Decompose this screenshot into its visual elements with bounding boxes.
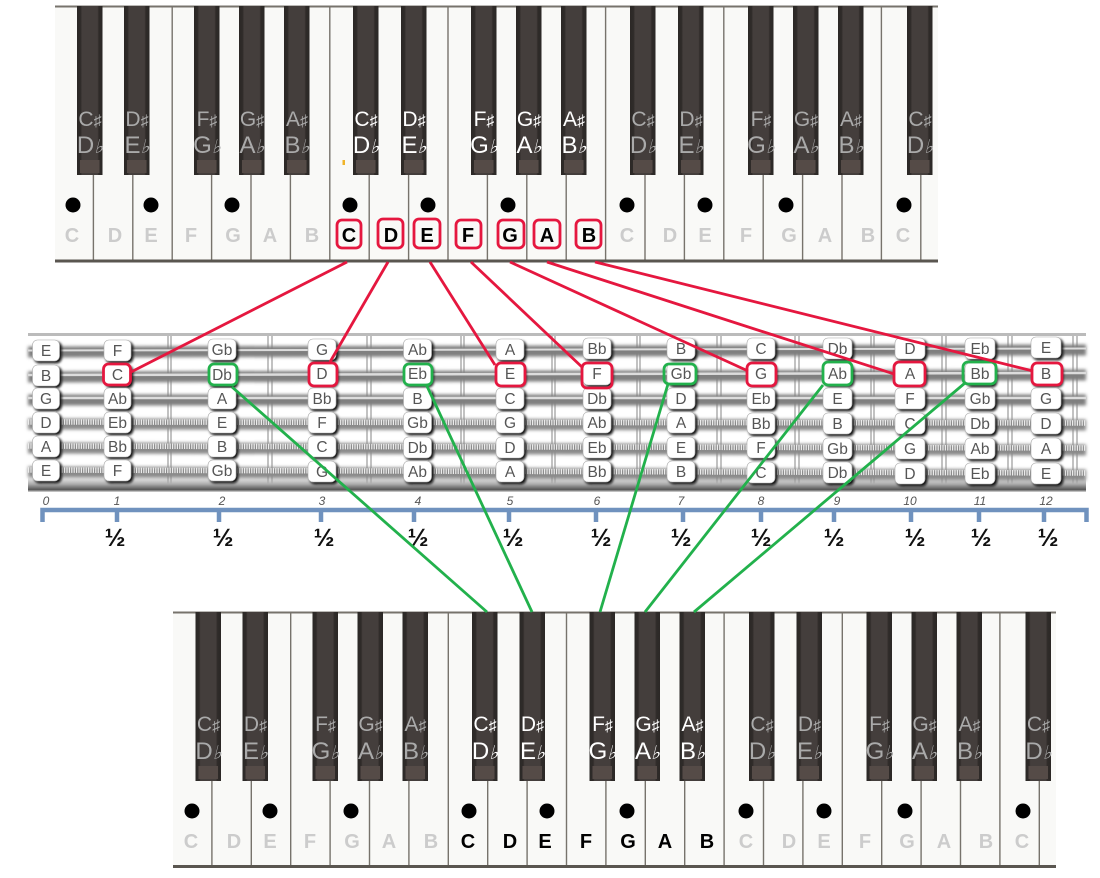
- note names: C: [755, 341, 767, 358]
- note names: Bb: [108, 439, 127, 456]
- note names: D: [40, 415, 52, 432]
- half-step labels: ½: [314, 524, 334, 552]
- red connector lines from top keyboard to natural notes on fretboard: [131, 262, 1033, 374]
- position dots, bottom keyboard: [184, 804, 1030, 818]
- black keys with sharp and flat names, bottom keyboard: C♯: [473, 713, 497, 736]
- note names: Gb: [827, 441, 848, 458]
- note names: C: [755, 465, 767, 482]
- black keys with sharp and flat names, bottom keyboard: G♯: [635, 713, 660, 736]
- black keys with sharp and flat names, top keyboard: G♭: [747, 132, 776, 159]
- note names: Gb: [970, 391, 990, 408]
- white key names, top keyboard: G: [502, 225, 518, 247]
- note names: Eb: [971, 466, 989, 483]
- white key names, top keyboard: F: [185, 225, 197, 247]
- note names: Ab: [108, 391, 127, 408]
- note names: B: [676, 464, 686, 481]
- half-step ruler bracket: [42, 510, 1086, 522]
- note names: Gb: [407, 415, 428, 432]
- fret numbers: 0: [43, 494, 50, 508]
- black keys with sharp and flat names, bottom keyboard: B♭: [957, 738, 983, 765]
- note names: A: [676, 415, 687, 432]
- fret numbers: 2: [218, 494, 226, 508]
- fret numbers: 10: [903, 494, 917, 508]
- half-step labels: ½: [971, 524, 991, 552]
- note names: A: [41, 439, 52, 456]
- black keys with sharp and flat names, bottom keyboard: A♭: [358, 738, 384, 765]
- half-step labels: ½: [503, 524, 523, 552]
- black keys with sharp and flat names, top keyboard: G♯: [517, 108, 541, 131]
- note names: A: [905, 366, 916, 383]
- note names: Bb: [588, 341, 606, 358]
- note names: D: [504, 440, 516, 457]
- red highlight boxes around natural notes: [337, 219, 601, 248]
- half-step labels: ½: [591, 524, 611, 552]
- note names: Eb: [971, 341, 989, 358]
- note names: G: [316, 464, 328, 481]
- white key names, bottom keyboard: G: [344, 831, 360, 853]
- black keys with sharp and flat names, top keyboard: F♯: [474, 108, 494, 131]
- black keys with sharp and flat names, top keyboard: G♯: [794, 108, 818, 131]
- fret numbers: 12: [1039, 494, 1053, 508]
- note names: G: [1040, 391, 1052, 408]
- black keys with sharp and flat names, bottom keyboard: D♭: [195, 738, 223, 765]
- black keys with sharp and flat names, bottom keyboard: B♭: [680, 738, 706, 765]
- black keys with sharp and flat names, top keyboard: E♭: [402, 132, 428, 159]
- white key names, top keyboard: C: [620, 225, 634, 247]
- note names: B: [41, 368, 51, 385]
- black keys with sharp and flat names, top keyboard: D♯: [125, 108, 149, 131]
- white key names, top keyboard: F: [462, 225, 474, 247]
- black keys with sharp and flat names, top keyboard: A♭: [517, 132, 543, 159]
- fret numbers: 5: [507, 494, 514, 508]
- black keys with sharp and flat names, bottom keyboard: E♭: [520, 738, 546, 765]
- white key names, bottom keyboard: D: [503, 831, 517, 853]
- black keys with sharp and flat names, bottom keyboard: G♭: [866, 738, 894, 765]
- black keys with sharp and flat names, top keyboard: A♯: [840, 108, 862, 131]
- half-step labels: ½: [105, 524, 125, 552]
- white key names, bottom keyboard: F: [580, 831, 592, 853]
- black keys with sharp and flat names, bottom keyboard: F♯: [592, 713, 613, 736]
- black keys with sharp and flat names, top keyboard: A♯: [563, 108, 585, 131]
- note names: B: [676, 341, 686, 358]
- white key names, top keyboard: B: [861, 225, 875, 247]
- green outlines on fretboard accidental notes: [209, 362, 996, 385]
- fret numbers: 8: [758, 494, 765, 508]
- half-step labels: ½: [824, 524, 844, 552]
- fret numbers: 9: [834, 494, 841, 508]
- note names: [40, 340, 1052, 483]
- frets: [168, 336, 1077, 484]
- white key names, bottom keyboard: B: [700, 831, 714, 853]
- note names: Ab: [588, 415, 606, 432]
- black keys with sharp and flat names, top keyboard: B♭: [562, 132, 588, 159]
- note names: Db: [828, 341, 847, 358]
- black keys with sharp and flat names, bottom keyboard: C♯: [1027, 713, 1050, 736]
- note names: E: [676, 440, 686, 457]
- note names: D: [904, 466, 916, 483]
- black keys with sharp and flat names, bottom keyboard: F♯: [315, 713, 336, 736]
- black keys with sharp and flat names, bottom keyboard: G♭: [312, 738, 340, 765]
- note names: C: [112, 367, 123, 384]
- black keys with sharp and flat names, bottom keyboard: D♯: [244, 713, 267, 736]
- note names: E: [41, 463, 51, 480]
- half-step labels: ½: [408, 524, 428, 552]
- note names: D: [904, 341, 916, 358]
- white key names, bottom keyboard: A: [658, 831, 672, 853]
- white key names, bottom keyboard: B: [424, 831, 438, 853]
- note names: C: [316, 439, 328, 456]
- bottom piano keyboard: [173, 612, 1056, 868]
- white key names, top keyboard: F: [740, 225, 752, 247]
- note names: B: [217, 439, 227, 456]
- note names: Ab: [408, 342, 427, 359]
- note names: C: [904, 416, 916, 433]
- white key names, top keyboard: E: [420, 225, 434, 247]
- half-step labels: ½: [905, 524, 925, 552]
- note names: B: [832, 416, 843, 433]
- black keys with sharp and flat names, bottom keyboard: G♯: [912, 713, 937, 736]
- note names: C: [504, 391, 516, 408]
- black keys with sharp and flat names, bottom keyboard: C♯: [197, 713, 220, 736]
- fret numbers: 3: [319, 494, 326, 508]
- white key names, bottom keyboard: C: [1015, 831, 1029, 853]
- black keys with sharp and flat names, top keyboard: A♭: [794, 132, 820, 159]
- note names: F: [756, 440, 766, 457]
- note names: G: [40, 391, 52, 408]
- black keys with sharp and flat names, top keyboard: C♯: [631, 108, 655, 131]
- note names: F: [113, 463, 122, 480]
- small orange speck: [342, 160, 345, 165]
- white key names, top keyboard: G: [781, 225, 797, 247]
- white key names, top keyboard: D: [663, 225, 677, 247]
- black keys with sharp and flat names, bottom keyboard: D♯: [798, 713, 821, 736]
- note names: A: [505, 464, 516, 481]
- black keys with sharp and flat names, bottom keyboard: E♭: [797, 738, 823, 765]
- note names: Bb: [313, 391, 331, 408]
- fret numbers: 7: [678, 494, 686, 508]
- white key names, bottom keyboard: F: [859, 831, 871, 853]
- white key names, top keyboard: D: [384, 225, 398, 247]
- note names: Eb: [588, 440, 606, 457]
- note names: B: [412, 391, 423, 408]
- black keys with sharp and flat names, bottom keyboard: A♭: [912, 738, 938, 765]
- black keys with sharp and flat names, bottom keyboard: A♯: [958, 713, 981, 736]
- black keys with sharp and flat names, bottom keyboard: A♯: [404, 713, 427, 736]
- note names: Gb: [671, 366, 691, 383]
- black keys with sharp and flat names, top keyboard: B♭: [839, 132, 865, 159]
- note names: E: [505, 366, 515, 383]
- black keys with sharp and flat names, bottom keyboard: D♭: [472, 738, 499, 765]
- black keys with sharp and flat names, bottom keyboard: C♯: [750, 713, 774, 736]
- white key names, top keyboard: A: [540, 225, 554, 247]
- black keys with sharp and flat names, bottom keyboard: D♭: [1025, 738, 1053, 765]
- black keys with sharp and flat names, bottom keyboard: D♭: [749, 738, 776, 765]
- half-step labels: ½: [1038, 524, 1058, 552]
- note names: F: [905, 391, 915, 408]
- note names: F: [592, 366, 602, 383]
- white key names, top keyboard: C: [342, 225, 356, 247]
- fret numbers: 6: [594, 494, 601, 508]
- black keys with sharp and flat names, top keyboard: G♭: [193, 132, 222, 159]
- note names: D: [316, 366, 328, 383]
- white key names, top keyboard: B: [582, 225, 596, 247]
- note names: Db: [970, 416, 990, 433]
- white key names, top keyboard: C: [896, 225, 910, 247]
- black keys with sharp and flat names, bottom keyboard: G♯: [358, 713, 383, 736]
- note names: Bb: [588, 464, 606, 481]
- white key names, bottom keyboard: F: [304, 831, 316, 853]
- black keys with sharp and flat names, top keyboard: G♭: [470, 132, 499, 159]
- black keys with sharp and flat names, top keyboard: F♯: [751, 108, 771, 131]
- white key names, top keyboard: D: [108, 225, 122, 247]
- note names: Bb: [752, 416, 770, 433]
- note names: E: [832, 391, 843, 408]
- black keys with sharp and flat names, top keyboard: C♯: [78, 108, 102, 131]
- white key names, bottom keyboard: D: [782, 831, 796, 853]
- note names: Ab: [828, 366, 847, 383]
- note names: F: [113, 343, 122, 360]
- white key names, bottom keyboard: A: [937, 831, 951, 853]
- fret numbers: 4: [415, 494, 422, 508]
- white key names, bottom keyboard: [184, 831, 1029, 853]
- black keys with sharp and flat names, bottom keyboard: [195, 612, 1053, 781]
- note names: E: [1041, 466, 1051, 483]
- white key names, bottom keyboard: E: [817, 831, 831, 853]
- black keys with sharp and flat names, top keyboard: A♯: [286, 108, 308, 131]
- white key names, bottom keyboard: D: [227, 831, 241, 853]
- note names: D: [675, 391, 687, 408]
- note names: Eb: [752, 391, 770, 408]
- white key names, top keyboard: E: [698, 225, 712, 247]
- fret numbers: 11: [974, 494, 986, 508]
- note names: Gb: [212, 463, 232, 480]
- white key names, bottom keyboard: E: [263, 831, 277, 853]
- black keys with sharp and flat names, top keyboard: E♭: [679, 132, 705, 159]
- half-step labels: ½: [213, 524, 233, 552]
- note names: E: [217, 415, 227, 432]
- black keys with sharp and flat names, top keyboard: D♭: [77, 132, 104, 159]
- black keys with sharp and flat names, top keyboard: G♯: [240, 108, 264, 131]
- red outlines on fretboard natural notes: [104, 362, 1062, 388]
- guitar fretboard: [28, 333, 1086, 492]
- position dots, top keyboard: [66, 198, 912, 212]
- black keys with sharp and flat names, top keyboard: D♭: [907, 132, 934, 159]
- white key names, bottom keyboard: E: [538, 831, 552, 853]
- white key names, bottom keyboard: G: [620, 831, 636, 853]
- black keys with sharp and flat names, bottom keyboard: E♭: [243, 738, 269, 765]
- black keys with sharp and flat names, top keyboard: D♯: [679, 108, 703, 131]
- black keys with sharp and flat names, bottom keyboard: B♭: [403, 738, 429, 765]
- black keys with sharp and flat names, bottom keyboard: A♭: [635, 738, 661, 765]
- note names: B: [1041, 366, 1051, 383]
- white key names, top keyboard: C: [65, 225, 79, 247]
- white key names, top keyboard: A: [263, 225, 277, 247]
- black keys with sharp and flat names, top keyboard: C♯: [908, 108, 932, 131]
- note names: A: [505, 342, 516, 359]
- white key names, bottom keyboard: C: [184, 831, 198, 853]
- note names: E: [41, 343, 51, 360]
- green connector lines from fretboard accidentals to bottom keyboard: [232, 383, 965, 612]
- note names: E: [1041, 340, 1051, 357]
- note names: Eb: [408, 366, 427, 383]
- note names: D: [1040, 416, 1052, 433]
- note names: G: [504, 415, 516, 432]
- white key names, bottom keyboard: B: [979, 831, 993, 853]
- strings: [28, 348, 1086, 475]
- black keys with sharp and flat names, top keyboard: D♭: [353, 132, 380, 159]
- black keys with sharp and flat names, top keyboard: A♭: [240, 132, 266, 159]
- black keys with sharp and flat names, bottom keyboard: G♭: [589, 738, 617, 765]
- black keys with sharp and flat names, top keyboard: E♭: [125, 132, 151, 159]
- black keys with sharp and flat names, top keyboard: D♯: [402, 108, 426, 131]
- black keys with sharp and flat names, bottom keyboard: A♯: [681, 713, 704, 736]
- note boxes: [32, 337, 1061, 484]
- black keys with sharp and flat names, top keyboard: [77, 6, 934, 175]
- note names: G: [904, 441, 916, 458]
- note names: Gb: [212, 342, 232, 359]
- note names: Db: [212, 367, 232, 384]
- note names: G: [316, 342, 328, 359]
- white key names, bottom keyboard: G: [899, 831, 915, 853]
- note names: Ab: [408, 464, 427, 481]
- note names: A: [217, 391, 228, 408]
- half-step labels: [105, 524, 1058, 552]
- note names: Ab: [971, 441, 989, 458]
- black keys with sharp and flat names, bottom keyboard: D♯: [521, 713, 544, 736]
- white key names, top keyboard: B: [305, 225, 319, 247]
- white key names, bottom keyboard: C: [739, 831, 753, 853]
- note names: Db: [828, 465, 847, 482]
- half-step labels: ½: [671, 524, 691, 552]
- black keys with sharp and flat names, top keyboard: B♭: [285, 132, 311, 159]
- note names: A: [1041, 441, 1052, 458]
- white key names, bottom keyboard: A: [382, 831, 396, 853]
- note names: Bb: [971, 366, 989, 383]
- black keys with sharp and flat names, top keyboard: C♯: [354, 108, 378, 131]
- note names: Eb: [108, 415, 127, 432]
- white key names, top keyboard: A: [818, 225, 832, 247]
- fret numbers: [43, 494, 1053, 508]
- black keys with sharp and flat names, bottom keyboard: F♯: [869, 713, 890, 736]
- white key names, top keyboard: E: [144, 225, 158, 247]
- white key names, top keyboard: [65, 225, 910, 247]
- half-step labels: ½: [751, 524, 771, 552]
- black keys with sharp and flat names, top keyboard: F♯: [197, 108, 217, 131]
- note names: F: [317, 415, 327, 432]
- black keys with sharp and flat names, top keyboard: D♭: [630, 132, 657, 159]
- top piano keyboard: [55, 6, 938, 262]
- note names: Db: [408, 440, 427, 457]
- white key names, top keyboard: G: [225, 225, 241, 247]
- note names: Db: [587, 391, 607, 408]
- white key names, bottom keyboard: C: [461, 831, 475, 853]
- note names: G: [755, 366, 767, 383]
- fret numbers: 1: [114, 494, 120, 508]
